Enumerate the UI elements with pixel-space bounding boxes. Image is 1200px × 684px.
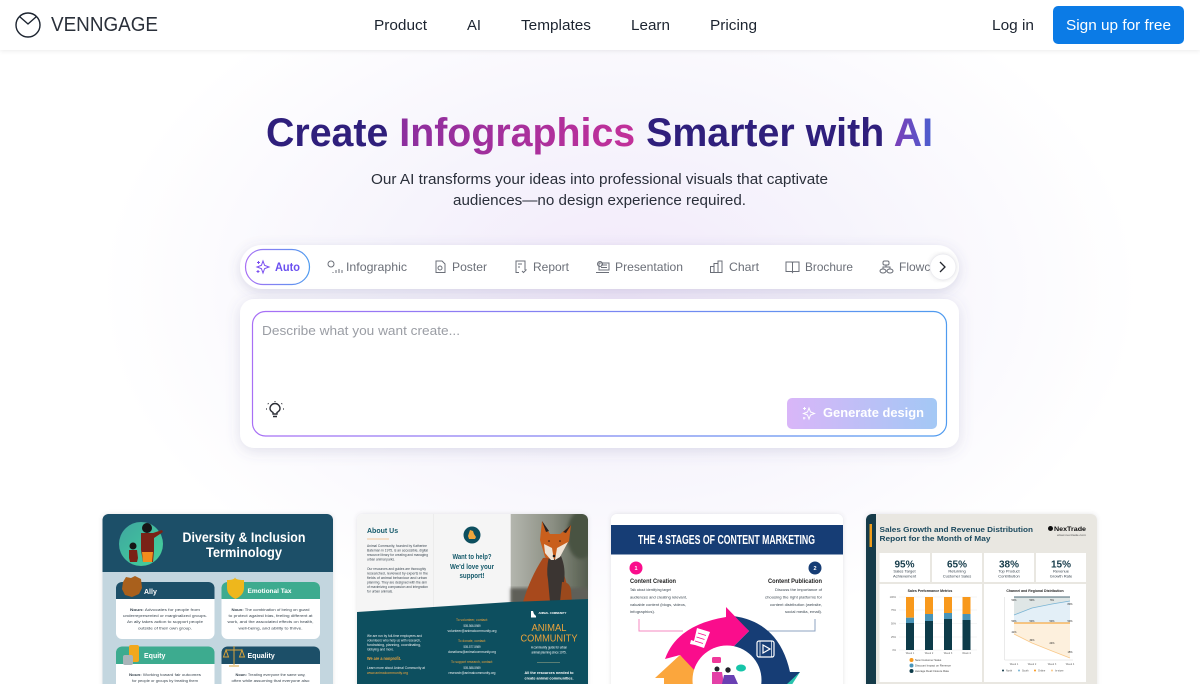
want to help column: We'd love your [450,564,494,571]
bar chart: sales performance metrics: 25% [891,636,897,639]
term: Equity: Noun: Working toward fair outcomes [129,672,201,677]
card header [102,514,333,572]
bar chart: sales performance metrics [880,584,982,682]
stage 1: valuable content (blogs, videos, [630,602,686,607]
bar chart: sales performance metrics: 75% [891,609,897,612]
term: Equity [116,645,214,684]
about us column: researched, reviewed by experts in the [367,570,429,576]
legend: South [1022,670,1029,672]
stage 2: Discuss the importance of [775,587,823,592]
navigation bar [0,0,1200,50]
term: Equity: for people or groups by treating them [132,678,199,683]
right cover text: COMMUNITY [520,634,578,644]
middle contact text: To support research, contact: [451,659,493,664]
right cover text: A community guide for urban [531,644,567,650]
term: Ally [116,576,214,639]
term: Emotional Tax: Noun: The combination of being on guard [232,607,310,612]
term: Emotional Tax: well-being, and ability to thrive. [238,626,302,630]
stage 1: 1 [634,566,638,572]
left contact text: volunteers who help us with research, [367,638,421,642]
line chart: channel and regional distribution: 50% [1011,599,1017,602]
term: Ally: outside of their own group. [138,626,192,630]
about us column: fields of animal behaviour and urban [367,575,427,580]
icon: light bulb [266,401,284,416]
right cover text: ANIMAL [532,623,567,634]
about us column: urban animal parks. [367,556,395,562]
kpi: returning: Returning [948,568,966,574]
line chart: channel and regional distribution: Week 3 [1048,663,1057,666]
bar chart: sales performance metrics: Week 2 [925,652,934,655]
card: Diversity and Inclusion Terminology [102,514,333,684]
term: Ally: Noun: Advocates for people from [130,607,201,612]
middle contact text: To volunteer, contact: [456,617,488,622]
report heading [880,526,1032,542]
term: Equality: often while assuming that everyone also [232,678,310,683]
stage 2: content distribution (website, [770,602,822,607]
line chart: channel and regional distribution: 50% [1067,620,1073,623]
bar chart: sales performance metrics: Week 1 [906,652,915,655]
kpi: sales target: Achievement [893,574,917,578]
card: Animal Community brochure [357,511,595,684]
kpi: top product: Top Product [998,568,1021,574]
stage 2: choosing the right platforms for [765,594,823,600]
line chart: channel and regional distribution: 15% [1067,651,1073,654]
nav links: AI [467,17,481,34]
middle contact text [448,617,496,675]
tab: Chart [710,260,760,274]
legend: New Customer Sales [915,658,942,662]
subtitle [371,171,828,209]
stage 1: Talk about identifying target [630,587,672,592]
logo [16,13,158,37]
stage 1: infographics). [630,609,655,614]
kpi: returning: 65% [947,560,967,570]
want to help column: support! [460,573,484,580]
arrow cycle diagram [655,607,800,684]
teal lower panel [357,599,588,684]
left contact text [367,633,426,675]
kpi: returning [932,553,982,582]
kpi: top product [984,553,1034,582]
kpi: sales target [880,553,930,582]
title: Create Infographics Smarter with AI [266,111,933,155]
middle contact text: volunteer@animalcommunity.org [448,628,496,633]
line chart: channel and regional distribution: Week 4 [1066,663,1075,666]
term: Ally: An ally takes action to support people [127,619,204,624]
stage 1 [630,562,687,631]
about us column: for urban animals. [367,588,393,594]
middle contact text: To donate, contact: [458,638,486,643]
sign up button [1053,6,1184,44]
term: Emotional Tax [222,577,320,639]
sign up button: Sign up for free [1066,17,1171,34]
tab: Brochure: Brochure [805,260,853,274]
brand: NexTrade [1054,527,1087,533]
subtitle: audiences—no design experience required. [453,192,746,209]
legend [910,658,951,673]
placeholder text: Describe what you want create... [262,323,460,338]
center circle [692,646,762,684]
middle contact text: donations@animalcommunity.org [448,649,496,654]
legend: Online [1038,670,1046,672]
kpi: top product: Contribution [998,574,1020,578]
card shadows [102,514,1097,684]
kpi: revenue growth: Revenue [1053,568,1070,574]
line chart: channel and regional distribution: 50% [1049,620,1055,623]
panel: prompt box [240,299,959,448]
subtitle: Our AI transforms your ideas into professional visuals that captivate [371,171,828,188]
orange arrow [655,655,694,684]
term: Emotional Tax: to protect against bias, feeling different at [228,613,314,618]
generate design button [787,398,937,429]
term: Equality: Noun: Treating everyone the same way, [236,672,306,677]
stage 2 [765,562,823,631]
kpi: top product: 38% [999,560,1019,570]
term: Ally: Ally [144,589,157,596]
kpi: revenue growth: 15% [1051,560,1071,570]
nav links [374,17,757,34]
want to help column: Want to help? [452,554,492,561]
bar chart: sales performance metrics: Week 3 [944,652,953,655]
line chart: channel and regional distribution: 41% [1011,631,1017,634]
brand: www.nextrade.com [1057,533,1087,537]
tab: Report: Report [533,260,570,274]
tab: Flowchart: Flowchart [899,260,952,274]
right cover text [520,611,578,680]
tab: Auto: Auto [275,260,300,274]
navy arrow [727,616,800,684]
right cover text: All the resources needed to [524,670,574,675]
line chart: channel and regional distribution: 50% [1029,599,1035,602]
tab: Presentation: Presentation [615,260,683,274]
term: Ally: underrepresented or marginalized groups. [123,613,207,618]
card: The 4 Stages of Content Marketing [611,514,843,684]
panel: design type tabs [240,245,959,289]
term: Equality [222,646,320,684]
nav links: Templates [521,17,591,34]
legend: North [1006,670,1013,672]
kpi: revenue growth [1036,553,1086,582]
middle contact text: 505-577-5989 [464,644,481,649]
left contact text: fundraising, planning, coordinating, [367,642,421,647]
tab: Flowchart [880,260,930,274]
line chart: channel and regional distribution: 24% [1049,642,1055,645]
tab: Infographic: Infographic [346,260,407,274]
kpi: revenue growth: Growth Rate [1050,574,1073,578]
want to help column [450,526,494,580]
left contact text: We are a nonprofit. [367,656,401,661]
about us column: Bateman in 1975, is an accessible, digital [367,548,428,552]
line chart: channel and regional distribution: Week 1 [1010,663,1019,666]
icon: parent and child [119,522,163,566]
bar chart: sales performance metrics: Sales Performance Metrics [908,589,952,593]
about us column: of maximizing compassion and integration [367,584,428,589]
tab: Report [516,260,570,274]
legend: Average Deal Closure Rate [915,669,949,673]
tab: Poster: Poster [452,260,487,274]
kpi: returning: Customer Sales [943,574,971,578]
right cover text: animal planning since 1975. [532,650,566,654]
line chart: channel and regional distribution: Week 2 [1028,663,1037,666]
about us column: Our resources and guides are thoroughly [367,566,426,571]
log in link: Log in [992,17,1034,34]
stage 2: Content Publication [768,579,822,585]
about us column: resource library for creating and managing [367,552,428,557]
tab: Chart: Chart [729,260,760,274]
teal arrow [787,672,800,684]
line chart: channel and regional distribution: 80% [1067,603,1073,606]
nav links: Pricing [710,17,757,34]
nav links: Learn [631,17,670,34]
legend: In-store [1055,670,1064,672]
title band [611,525,843,554]
card header: Diversity & Inclusion [182,529,306,545]
center people [712,657,746,684]
about us column: planning. They are designed with the aim [367,580,428,584]
about us column: Animal Community, founded by Katherine [367,543,428,548]
line chart: channel and regional distribution: 34% [1029,639,1035,642]
left contact text: www.animalcommunity.org [367,670,408,675]
logo: VENNGAGE [51,14,158,36]
about us column [367,528,429,594]
photo: fox [508,514,588,602]
middle contact text: 505-566-5989 [464,623,481,628]
bar chart: sales performance metrics: 50% [891,622,897,626]
stage 2: social media, email). [785,609,822,614]
card header: Terminology [206,544,282,560]
right cover text: create animal communities. [524,676,574,680]
tab: Poster [436,260,487,274]
icon: document [690,628,710,648]
scroll right button [930,254,956,280]
brand [1048,526,1086,536]
nav links: Product [374,17,428,34]
left contact text: Learn more about Animal Community at [367,665,426,670]
term: Emotional Tax: Emotional Tax [248,588,292,595]
pink arrow [665,607,749,670]
term: Equity: Equity [144,653,165,660]
term: Equality: Equality [248,653,275,660]
line chart: channel and regional distribution [984,584,1086,682]
prompt input [252,312,946,436]
report heading: Sales Growth and Revenue Distribution [880,525,1033,534]
icon: video [757,641,774,657]
right cover text: ANIMAL COMMUNITY [538,611,567,615]
legend: Discount Impact on Revenue [915,664,951,668]
stage 2: 2 [813,566,817,572]
middle contact text: research@animalcommunity.org [448,670,496,675]
bar chart: sales performance metrics: 0% [892,649,897,652]
line chart: channel and regional distribution: 50% [1011,620,1017,623]
line chart: channel and regional distribution: 50% [1029,620,1035,623]
stage 1: audiences and creating relevant, [630,594,687,600]
stage 1: Content Creation [630,579,676,585]
middle contact text: 505-588-5989 [464,665,481,670]
line chart: channel and regional distribution: Channel and Regional Distribution [1006,589,1064,593]
kpi: sales target: Sales Target [893,568,916,574]
generate design button: Generate design [823,405,924,420]
bar chart: sales performance metrics: Week 4 [962,652,971,655]
report heading: Report for the Month of May [880,534,991,543]
tab: Auto [246,250,310,284]
legend [1002,670,1064,672]
bar chart: sales performance metrics: 100% [890,596,897,599]
term: Emotional Tax: work, and the associated effects on health, [228,619,314,624]
about us column: About Us [367,528,398,535]
spine [866,514,876,684]
line chart: channel and regional distribution: 5% [1050,599,1055,602]
title band: THE 4 STAGES OF CONTENT MARKETING [638,532,815,547]
left contact text: lobbying and more. [367,646,394,652]
card: Sales Growth and Revenue Distribution [866,514,1097,684]
kpi: sales target: 95% [894,560,915,570]
left contact text: We are run by full-time employees and [367,633,422,638]
